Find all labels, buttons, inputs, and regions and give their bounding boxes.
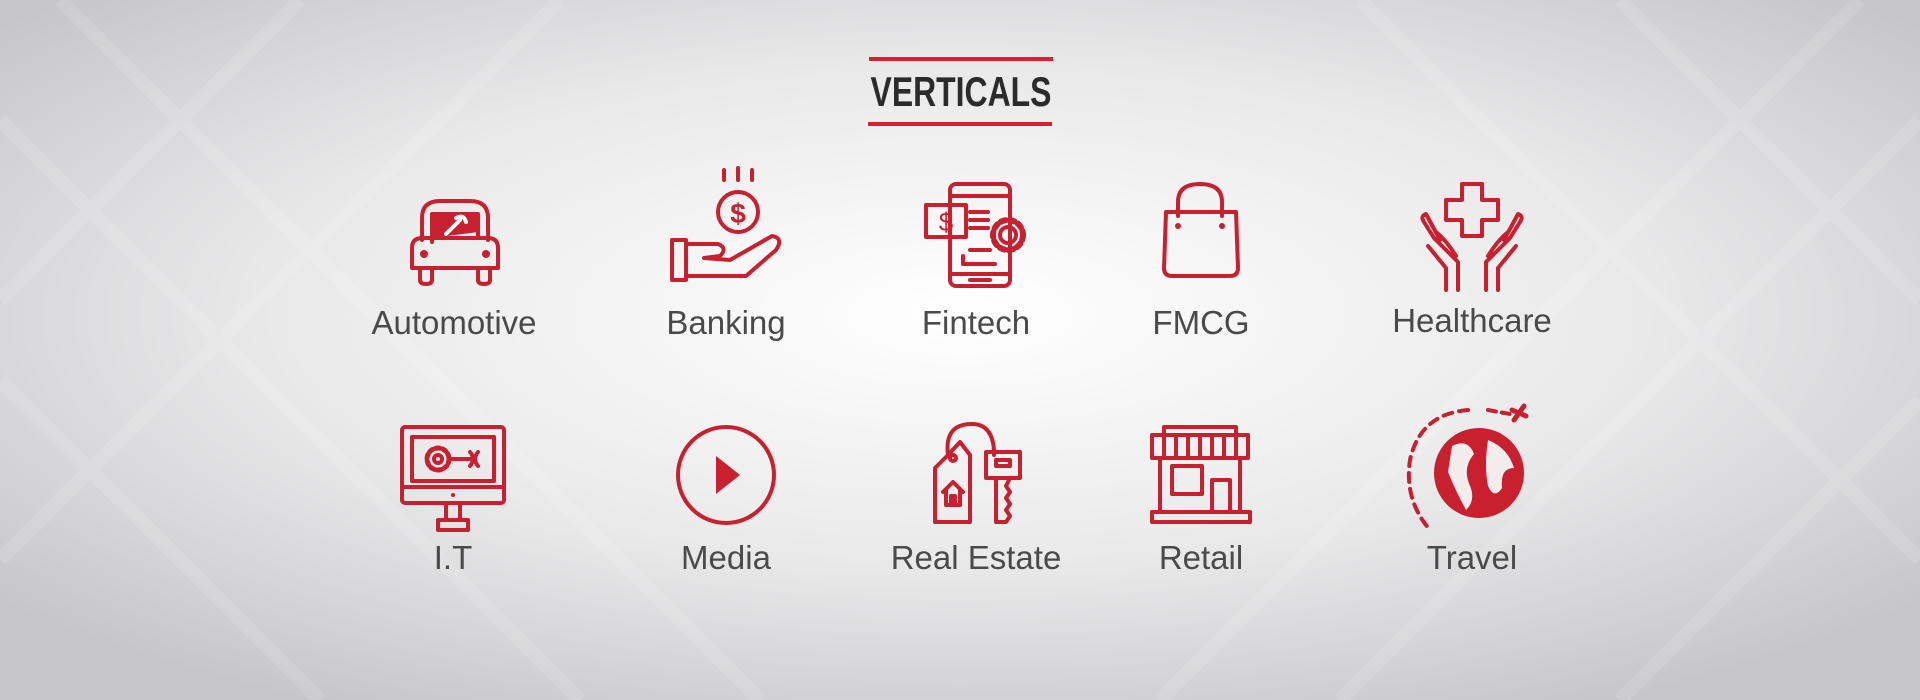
label: Media: Media xyxy=(681,539,772,576)
icon: retail store xyxy=(1152,427,1250,522)
title xyxy=(868,57,1053,126)
icon: banking hand coin xyxy=(672,168,779,280)
label: Banking: Banking xyxy=(666,304,786,341)
label: Automotive: Automotive xyxy=(371,304,537,341)
icon: automotive car xyxy=(412,201,498,284)
icon: healthcare hands cross xyxy=(1422,184,1522,290)
title: VERTICALS xyxy=(871,68,1051,115)
icon: banking hand coin: $ xyxy=(730,198,746,229)
label: Healthcare: Healthcare xyxy=(1392,302,1552,339)
icon: IT monitor xyxy=(402,427,504,530)
icon: fintech phone: $ xyxy=(939,207,954,237)
label: Real Estate: Real Estate xyxy=(891,539,1061,576)
icon: FMCG shopping bag xyxy=(1164,184,1238,276)
icon: travel globe xyxy=(1409,406,1526,530)
label: Retail: Retail xyxy=(1159,539,1243,576)
label: I.T: I.T xyxy=(434,539,472,576)
label: Fintech: Fintech xyxy=(922,304,1030,341)
label: FMCG: FMCG xyxy=(1152,304,1250,341)
icon: real estate tag and key xyxy=(935,424,1020,522)
icon: fintech phone xyxy=(926,184,1023,286)
label: Travel: Travel xyxy=(1427,539,1517,576)
icon: media play xyxy=(678,427,774,523)
